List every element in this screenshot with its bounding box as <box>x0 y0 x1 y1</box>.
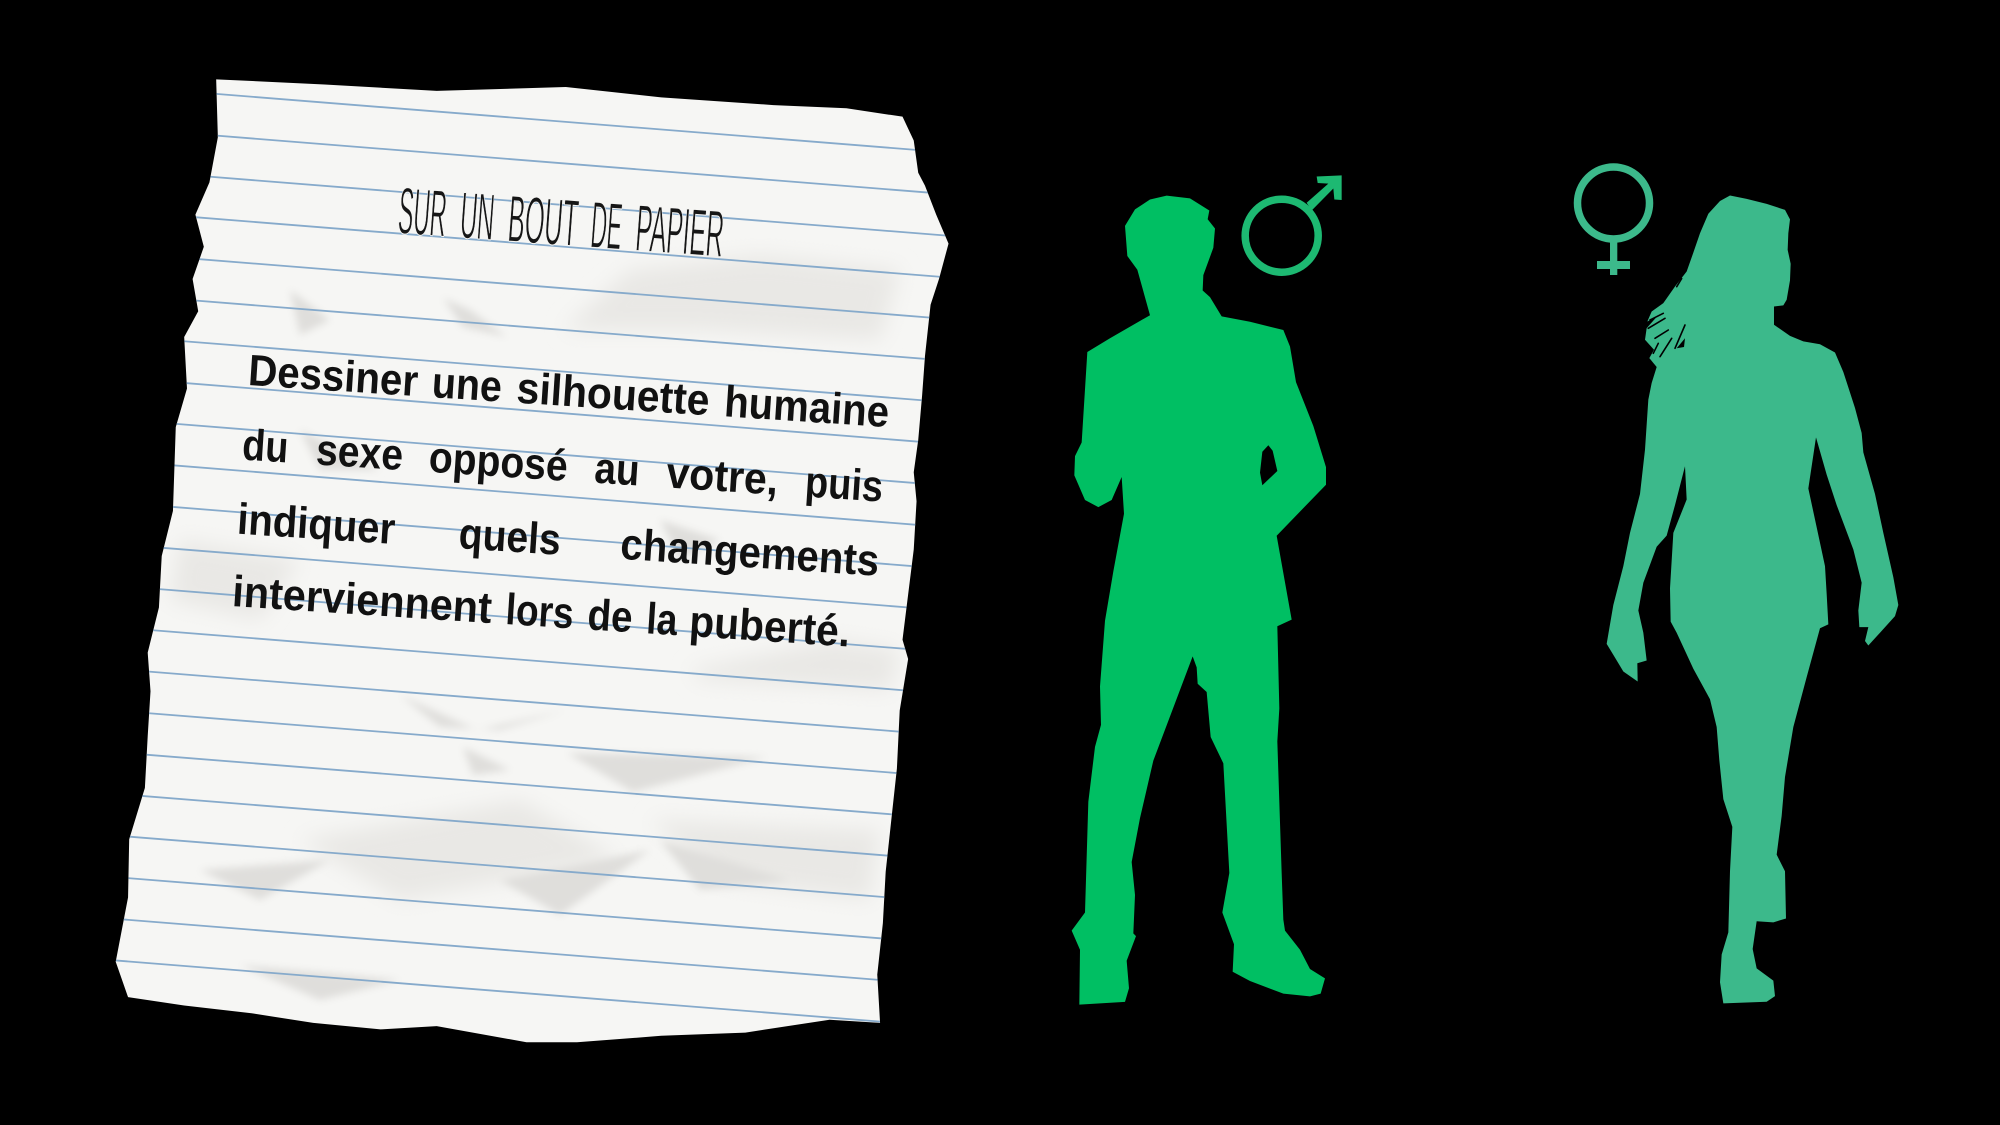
paper instruction text: au <box>593 444 641 496</box>
paper instruction text: de <box>586 590 634 642</box>
paper instruction text: silhouette <box>515 364 711 425</box>
paper creases and ruled lines <box>100 85 950 1027</box>
paper instruction text: indiquer <box>236 495 397 554</box>
paper instruction text: humaine <box>723 377 891 437</box>
paper title: UN <box>458 178 497 254</box>
paper instruction text: votre, <box>665 448 780 505</box>
paper instruction text: puberté. <box>688 597 852 657</box>
panel: torn lined paper: PAPIER <box>633 191 727 271</box>
female silhouette <box>1607 195 1898 1003</box>
paper instruction text: interviennent <box>231 567 494 633</box>
paper instruction text: Dessiner <box>247 346 420 406</box>
paper title <box>396 173 727 271</box>
paper instruction text: lors <box>504 585 575 638</box>
paper instruction text <box>231 346 891 657</box>
panel: torn lined paper <box>100 79 950 1042</box>
paper instruction text: changements <box>619 520 881 586</box>
hair strands <box>1648 278 1685 357</box>
paper title: BOUT <box>506 181 581 260</box>
paper instruction text: du <box>241 421 290 472</box>
paper instruction text: puis <box>804 458 885 512</box>
paper instruction text: une <box>430 358 504 412</box>
male silhouette <box>1072 196 1326 1005</box>
icon: female symbol <box>1578 167 1650 275</box>
paper instruction text: opposé <box>427 433 569 491</box>
icon: male symbol <box>1245 175 1342 272</box>
hair wedge <box>1677 338 1685 348</box>
paper instruction text: sexe <box>315 425 405 480</box>
paper title: DE <box>588 187 625 263</box>
paper instruction text: quels <box>457 509 562 565</box>
paper sheet <box>116 79 949 1042</box>
paper instruction text: la <box>645 594 680 645</box>
infographic canvas <box>116 79 1898 1042</box>
paper title: SUR <box>396 173 449 250</box>
